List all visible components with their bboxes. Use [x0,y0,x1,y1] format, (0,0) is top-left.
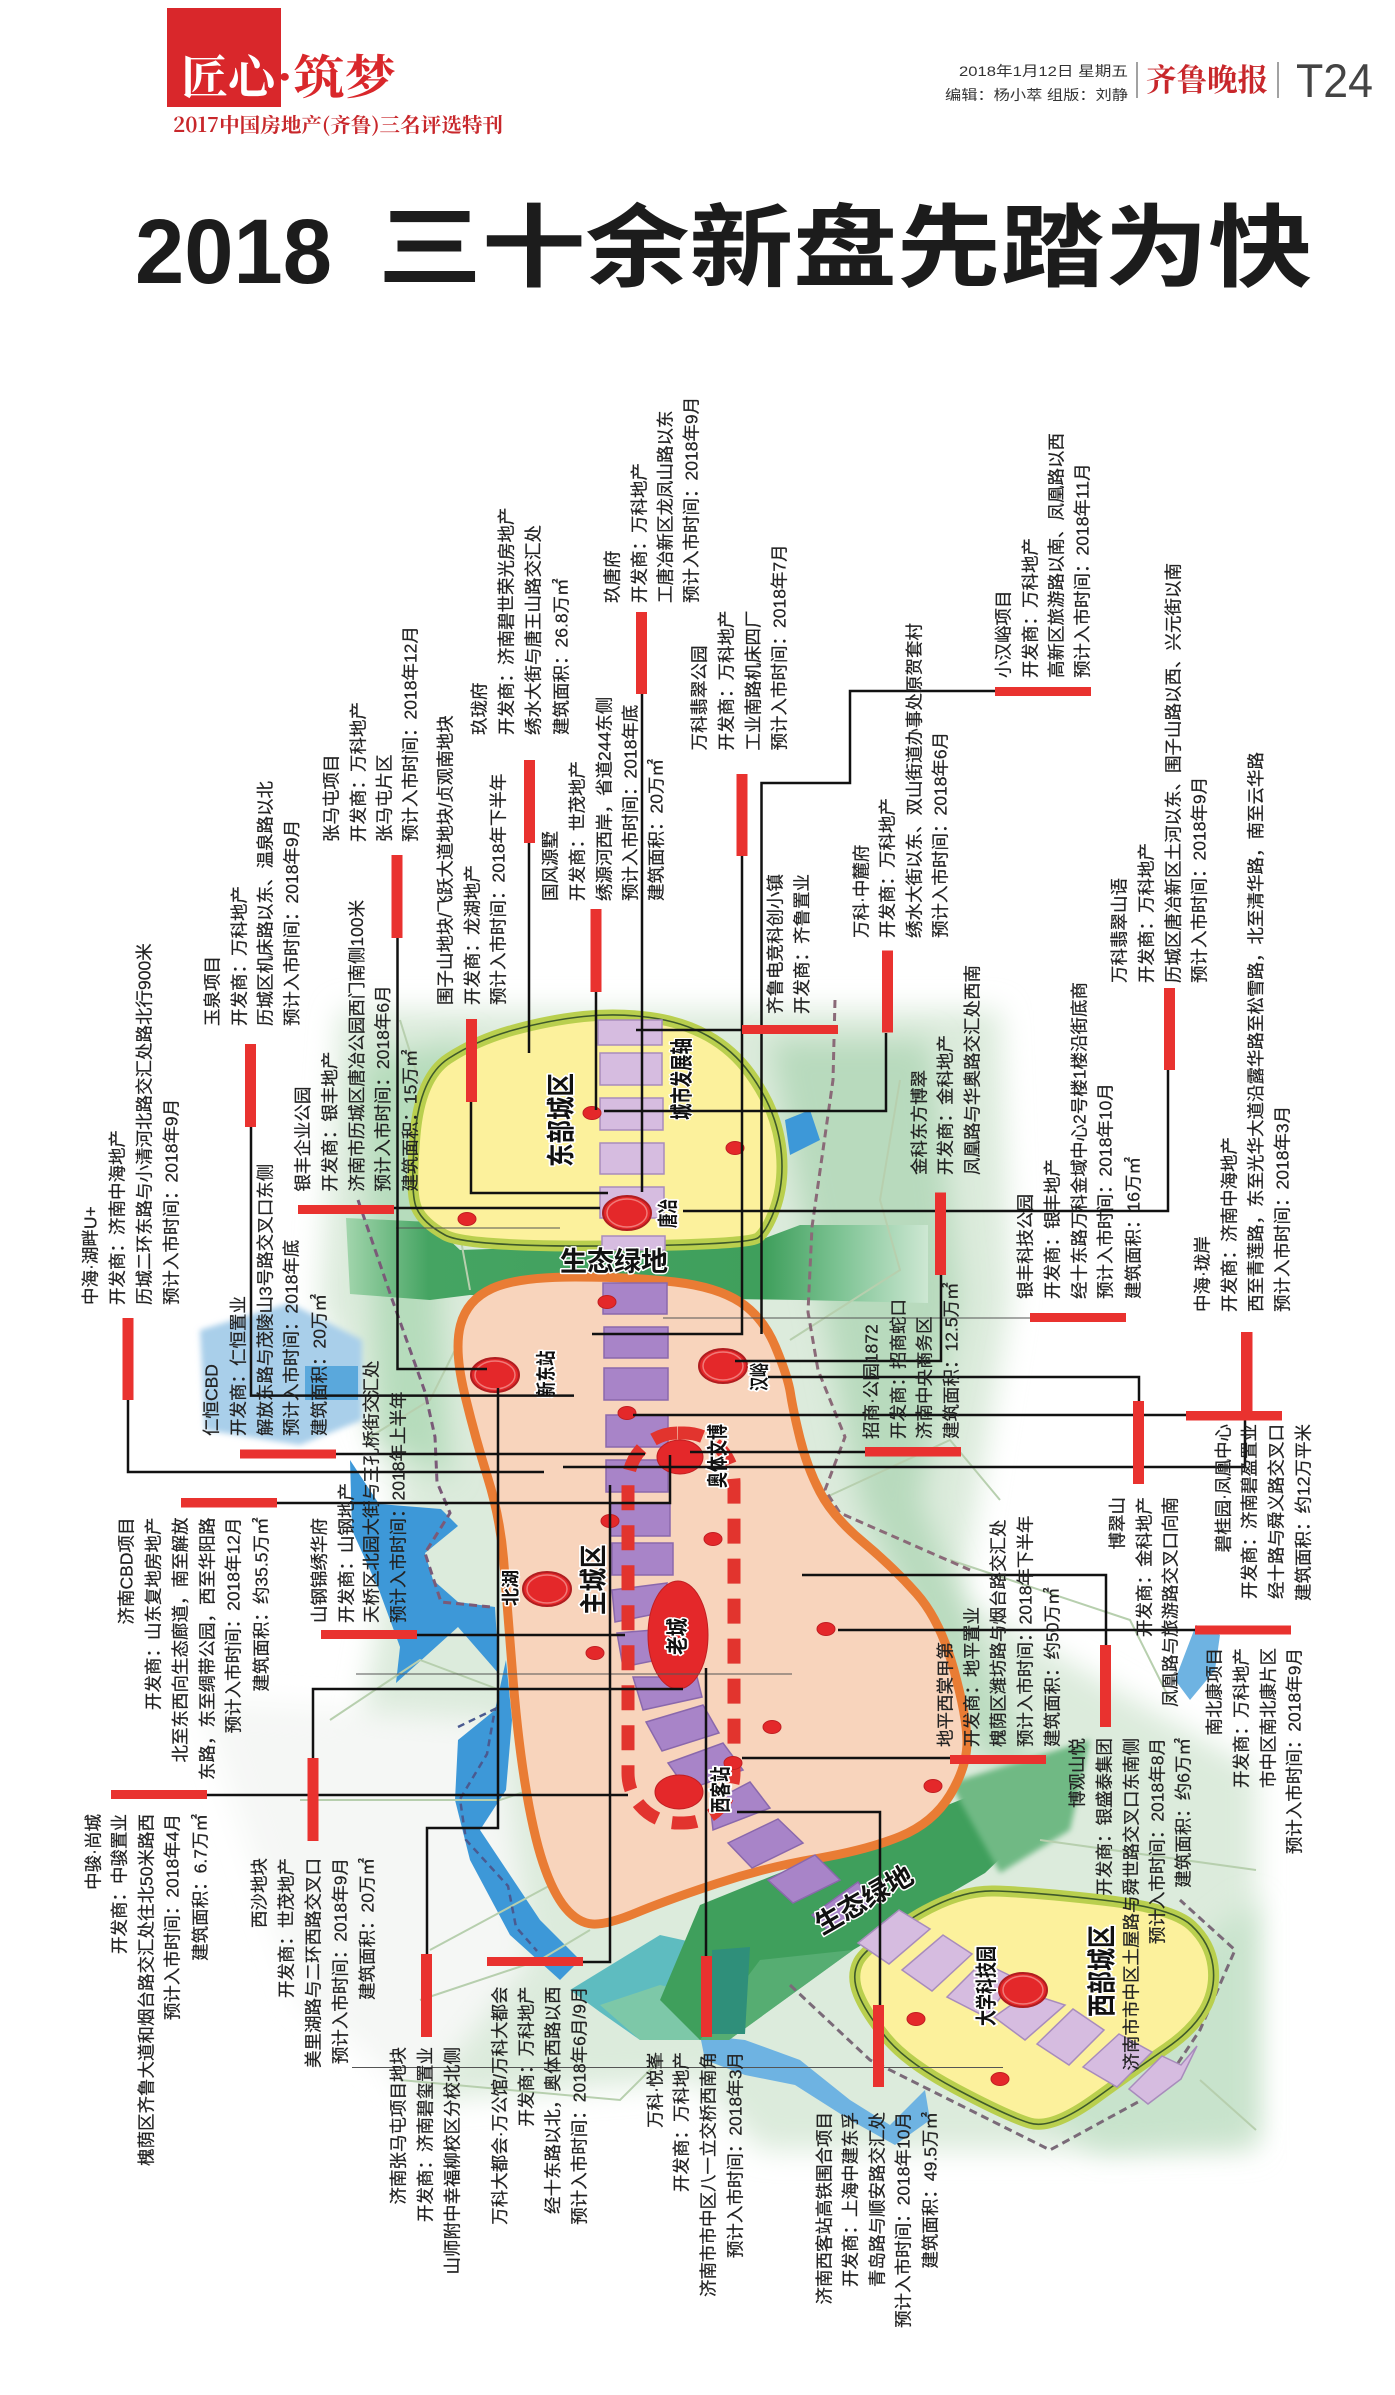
text: 国风源墅: 开发商：世茂地产 [568,761,588,901]
text: 玉泉项目: 玉泉项目 [203,956,223,1026]
text: 招商·公园1872 [862,1282,962,1439]
text: 济南CBD项目: 东路，东至绸带公园，西至华阳路 [198,1517,218,1780]
text: 仁恒CBD: 解放东路与茂陵山3号路交叉口东侧 [256,1164,276,1436]
map: district and place labels: 大学科技园 [970,1946,1001,2026]
text: 济南西客站高铁围合项目: 济南西客站高铁围合项目 [815,2112,835,2304]
text: 博翠山: 博翠山 [1108,1497,1128,1550]
text: 仁恒CBD [202,1164,330,1436]
text: 银丰科技公园: 预计入市时间：2018年10月 [1096,1083,1116,1299]
text: 博观山悦: 建筑面积：约6万㎡ [1174,1738,1194,1888]
text: 围子山地块: 围子山地块/飞跃大道地块/贞观南地块 [436,715,456,1005]
text: 玉泉项目 [203,781,302,1026]
text: 中骏·尚城: 中骏·尚城 [84,1814,104,1890]
text: 玖珑府: 绣水大街与唐王山路交汇处 [524,525,544,735]
text: 国风源墅: 建筑面积：20万㎡ [647,759,667,901]
text: 南北康项目: 南北康项目 [1205,1648,1225,1736]
text: 万科翡翠公园: 工业南路机床四厂 [744,610,764,750]
text: 万科翡翠山语: 万科翡翠山语 [1110,878,1130,983]
map: district and place labels: 汉峪 [743,1363,772,1391]
text: 国风源墅: 预计入市时间：2018年底 [621,705,641,901]
masthead: newspaper name: 齐鲁晚报 [1146,55,1268,100]
text: 仁恒CBD: 开发商：仁恒置业 [229,1296,249,1436]
text: 招商·公园1872: 开发商：招商蛇口 [889,1299,909,1439]
text: 中海·湖畔U+: 中海·湖畔U+ [81,1206,101,1305]
text: 南北康项目 [1205,1648,1305,1854]
text: 济南CBD项目: 开发商：山东复地房地产 [144,1518,164,1710]
text: 万科大都会 [490,1986,590,2225]
title [135,175,1312,305]
text: 小汉峪项目: 高新区旅游路以南、凤凰路以西 [1047,433,1067,678]
text: 齐鲁电竞科创小镇: 齐鲁电竞科创小镇 [766,874,786,1014]
text: 地平西棠甲第: 预计入市时间：2018年下半年 [1016,1516,1036,1747]
text: 地平西棠甲第: 建筑面积：约50万㎡ [1043,1587,1063,1747]
text: 万科·中麓府: 绣水大街以东、双山街道办事处原贺套村 [905,623,925,938]
text: 万科翡翠公园: 开发商：万科地产 [717,610,737,750]
text: 中骏·尚城: 预计入市时间：2018年4月 [163,1814,183,2020]
text: 济南西客站高铁围合项目: 建筑面积：49.5万㎡ [921,2112,941,2269]
map: ecological green belts [346,1218,1090,2040]
text: 济南张马屯项目地块: 济南张马屯项目地块 [389,2047,409,2204]
text: 银丰企业公园: 建筑面积：15万㎡ [400,1049,420,1192]
map: purple development blocks [598,1020,1197,2104]
text: 万科·悦峯: 开发商：万科地产 [672,2052,692,2192]
text: 围子山地块 [436,715,509,1005]
text: 地平西棠甲第: 地平西棠甲第 [936,1642,956,1747]
text: 玖珑府: 建筑面积：26.8万㎡ [552,578,572,735]
text: 小汉峪项目: 开发商：万科地产 [1021,538,1041,678]
text: 小汉峪项目: 小汉峪项目 [994,590,1014,678]
text: 山钢锦绣华府: 天桥区北园大街与三孔桥街交汇处 [362,1360,382,1623]
text: 济南西客站高铁围合项目: 开发商：上海中建东孚 [841,2112,861,2287]
text: 银丰企业公园 [293,900,420,1192]
text: 万科翡翠公园: 预计入市时间：2018年7月 [770,544,790,750]
text: 博翠山 [1108,1497,1181,1707]
text: 金科东方博翠: 金科东方博翠 [910,1070,930,1175]
map: district and place labels: 西客站 [705,1767,735,1813]
page number: T24 [1296,54,1373,107]
text: 仁恒CBD: 仁恒CBD [202,1364,222,1436]
text: 银丰企业公园: 济南市历城区唐冶公园西门南侧100米 [347,900,367,1192]
text: 张马屯项目: 张马屯片区 [375,754,395,842]
map: district and place labels: 西部城区 [1080,1925,1121,2017]
text: 中海·湖畔U+: 开发商：济南中海地产 [108,1130,128,1305]
text: 仁恒CBD: 预计入市时间：2018年底 [282,1240,302,1436]
text: 中海·珑岸: 开发商：济南中海地产 [1220,1137,1240,1312]
map: district and place labels: 东部城区 [539,1073,580,1167]
text: 济南西客站高铁围合项目: 青岛路与顺安路交汇处 [868,2112,888,2287]
text: 金科东方博翠 [910,965,983,1175]
text: 万科翡翠公园 [690,544,790,750]
text: 小汉峪项目 [994,433,1093,678]
text: 小汉峪项目: 预计入市时间：2018年11月 [1073,463,1093,678]
masthead: date and editor credits [945,63,1128,103]
text: 玖珑府: 开发商：济南碧世荣光房地产 [497,508,517,735]
text: 金科东方博翠: 开发商：金科地产 [936,1035,956,1175]
text: 金科东方博翠: 凤凰路与华奥路交汇处西南 [963,965,983,1175]
map: district and place labels: 生态绿地 [806,1854,920,1942]
text: 西沙地块: 开发商：世茂地产 [277,1858,297,1998]
text: 万科大都会: 万科大都会·万公馆/万科大都会 [490,1986,510,2225]
text: 万科翡翠山语 [1110,563,1210,983]
text: 万科·中麓府: 预计入市时间：2018年6月 [931,732,951,938]
zone: west city district [855,1891,1214,2124]
text: 济南CBD项目: 建筑面积：约35.5万㎡ [252,1517,272,1692]
text: 山钢锦绣华府: 开发商：山钢地产 [337,1483,357,1623]
text: 博翠山: 开发商：金科地产 [1135,1497,1155,1637]
text: 玖珑府 [470,508,572,735]
text: 中海·湖畔U+: 历城二环东路与小清河北路交汇处路北行900米 [135,943,155,1305]
text: 万科·悦峯 [646,2052,746,2297]
text: 玉泉项目: 开发商：万科地产 [230,886,250,1026]
text: 山钢锦绣华府 [310,1360,409,1623]
map: district and place labels: 城市发展轴 [663,1038,696,1120]
text: 西沙地块: 美里湖路与二环西路交叉口 [304,1858,324,2068]
text: 万科·中麓府 [852,623,951,938]
text: 招商·公园1872: 建筑面积：12.5万㎡ [942,1282,962,1439]
text: 万科·悦峯: 预计入市时间：2018年3月 [726,2052,746,2258]
zone: main city district [458,1277,967,1924]
text: 万科大都会: 开发商：万科地产 [516,1986,536,2126]
text: 碧桂园·凤凰中心: 经十路与舜义路交叉口 [1267,1424,1287,1599]
text: 玉泉项目: 预计入市时间：2018年9月 [282,820,302,1026]
text: 博观山悦: 济南市市中区土屋路与舜世路交叉口东南侧 [1122,1738,1142,2070]
map: river system [200,1110,1220,2145]
text: 中骏·尚城: 槐荫区齐鲁大道和烟台路交汇处往北50米路西 [137,1814,157,2166]
text: 招商·公园1872: 济南中央商务区 [915,1316,935,1439]
text: 玖唐府: 工唐冶新区龙凤山路以东 [656,410,676,603]
text: 张马屯项目: 预计入市时间：2018年12月 [401,626,421,842]
text: 张马屯项目: 张马屯项目 [322,754,342,842]
text: 中海·珑岸: 西至青莲路，东至光华大道沿露华路至松雪路，北至清华路，南至云华路 [1246,752,1266,1312]
map: district and place labels: 主城区 [572,1545,612,1615]
red callout bars [111,612,1291,2087]
text: 中海·珑岸: 预计入市时间：2018年3月 [1273,1106,1293,1312]
connector lines from project callouts to map points [128,691,1245,2005]
text: 中海·珑岸 [1193,752,1293,1312]
text: 银丰企业公园: 开发商：银丰地产 [320,1052,340,1192]
text: 玖唐府: 开发商：万科地产 [630,463,650,603]
text: 济南CBD项目: 济南CBD项目 [117,1518,137,1624]
text: 济南张马屯项目地块 [389,2047,463,2274]
text: 玖唐府: 预计入市时间：2018年9月 [682,397,702,603]
text: 西沙地块: 建筑面积：20万㎡ [358,1858,378,2000]
map: district and place labels: 生态绿地 [560,1240,668,1279]
text: 玖唐府: 玖唐府 [603,550,623,603]
text: 碧桂园·凤凰中心: 碧桂园·凤凰中心 [1214,1424,1234,1552]
text: 万科·悦峯: 万科·悦峯 [646,2052,666,2128]
text: 中骏·尚城 [84,1814,211,2166]
text: 博观山悦 [1068,1738,1194,2070]
text: 齐鲁电竞科创小镇: 开发商：齐鲁置业 [792,874,812,1014]
zone: east city district [413,1015,782,1246]
masthead: date and editor credits: 编辑：杨小萃 组版：刘静 [945,87,1128,103]
text: 万科翡翠山语: 开发商：万科地产 [1137,843,1157,983]
text: 中骏·尚城: 建筑面积：6.7万㎡ [191,1814,211,1961]
text: 万科·中麓府: 万科·中麓府 [852,845,872,938]
text: 碧桂园·凤凰中心: 开发商：济南碧盈置业 [1240,1424,1260,1599]
text: 中海·湖畔U+ [81,943,182,1305]
text: 国风源墅: 绣源河西岸，省道244东侧 [595,697,615,901]
text: 济南CBD项目: 预计入市时间：2018年12月 [224,1518,244,1733]
text: 山钢锦绣华府: 山钢锦绣华府 [310,1518,330,1623]
text: 济南张马屯项目地块: 山师附中幸福柳校区分校北侧 [443,2047,463,2274]
map: district and place labels: 新东站 [531,1350,560,1397]
text: 南北康项目: 开发商：万科地产 [1232,1648,1252,1788]
text: 张马屯项目: 开发商：万科地产 [349,702,369,842]
map: roads and boundary [300,1000,1256,2150]
text: 国风源墅 [541,697,667,901]
text: 南北康项目: 市中区南北康片区 [1259,1648,1279,1788]
text: 玖唐府 [603,397,702,603]
text: 济南CBD项目 [117,1517,272,1780]
map: dashed old town ring [628,1433,734,1823]
text: 银丰科技公园 [1016,982,1144,1299]
text: 博观山悦: 开发商：银盛泰集团 [1095,1738,1115,1896]
text: 西沙地块 [250,1858,378,2068]
text: 济南西客站高铁围合项目: 预计入市时间：2018年10月 [894,2112,914,2328]
text: 玉泉项目: 历城区机床路以东、温泉路以北 [256,781,276,1026]
title: 2018 [135,201,332,303]
masthead: column logo [167,8,503,138]
text: 博翠山: 凤凰路与旅游路交叉口向南 [1161,1497,1181,1707]
text: 济南西客站高铁围合项目 [815,2112,941,2328]
map: district and place labels [497,1038,1121,2026]
text: 万科翡翠公园: 万科翡翠公园 [690,646,710,750]
text: 地平西棠甲第 [936,1516,1063,1747]
text: 西沙地块: 西沙地块 [250,1858,270,1928]
text: 国风源墅: 国风源墅 [541,831,561,901]
text: 银丰科技公园: 开发商：银丰地产 [1043,1159,1063,1299]
text: 碧桂园·凤凰中心: 建筑面积：约12万平米 [1294,1424,1314,1601]
masthead: column logo: 匠心 [181,41,281,108]
text: 银丰企业公园: 银丰企业公园 [293,1087,313,1192]
text: 地平西棠甲第: 开发商：地平置业 [962,1607,982,1747]
text: 围子山地块: 预计入市时间：2018年下半年 [489,774,509,1005]
text: 博观山悦: 预计入市时间：2018年8月 [1148,1738,1168,1944]
text: 西沙地块: 预计入市时间：2018年9月 [331,1858,351,2064]
text: 博观山悦: 博观山悦 [1068,1738,1088,1808]
text: 银丰科技公园: 建筑面积：16万㎡ [1124,1157,1144,1299]
text: 银丰科技公园: 经十东路万科金域中心2号楼1楼沿街底商 [1070,982,1090,1299]
text: 招商·公园1872: 招商·公园1872 [862,1324,882,1439]
text: 中海·湖畔U+: 预计入市时间：2018年9月 [162,1099,182,1305]
map: red location markers [458,1106,1047,2086]
map: faded terrain base [200,1010,1256,2150]
map: district and place labels: 老城 [659,1617,692,1655]
text: 万科·中麓府: 开发商：万科地产 [878,798,898,938]
map: district and place labels: 奥体文博 [701,1424,732,1488]
masthead: column logo: 2017中国房地产(齐鲁)三名评选特刊 [173,109,503,138]
text: 银丰企业公园: 预计入市时间：2018年6月 [373,985,393,1192]
text: 碧桂园·凤凰中心 [1214,1424,1314,1601]
text: 仁恒CBD: 建筑面积：20万㎡ [310,1294,330,1436]
thin leader lines [352,1228,1030,2068]
text: 山钢锦绣华府: 预计入市时间：2018年上半年 [389,1392,409,1623]
map: district and place labels: 唐冶 [653,1199,682,1228]
text: 围子山地块: 开发商：龙湖地产 [463,865,483,1005]
text: 济南张马屯项目地块: 开发商：济南碧玺置业 [416,2047,436,2222]
text: 万科翡翠山语: 历城区唐冶新区土河以东、围子山路以西、兴元街以南 [1164,563,1184,983]
text: 玖珑府: 玖珑府 [470,682,490,735]
text: 南北康项目: 预计入市时间：2018年9月 [1285,1648,1305,1854]
map: district and place labels: 北湖 [497,1570,523,1606]
title: 三十余新盘先踏为快 [378,175,1312,305]
text: 地平西棠甲第: 槐荫区潍坊路与烟台路交汇处 [989,1520,1009,1747]
text: 中海·珑岸: 中海·珑岸 [1193,1236,1213,1312]
text: 张马屯项目 [322,626,421,842]
masthead: date and editor credits: 2018年1月12日 星期五 [959,63,1128,79]
city planning map [200,1000,1256,2150]
text: 济南CBD项目: 北至东西向生态廊道，南至解放 [171,1518,191,1762]
text: 万科翡翠山语: 预计入市时间：2018年9月 [1190,777,1210,983]
text: 万科大都会: 经十东路以北，奥体西路以西 [543,1986,563,2214]
text: 银丰科技公园: 银丰科技公园 [1016,1194,1036,1299]
masthead: column logo: ·筑梦 [276,41,396,108]
text: 中骏·尚城: 开发商：中骏置业 [110,1814,130,1954]
text: 万科大都会: 预计入市时间：2018年6月/9月 [570,1986,590,2225]
text: 齐鲁电竞科创小镇 [766,874,812,1014]
text: 万科·悦峯: 济南市市中区八一立交桥西南角 [699,2052,719,2297]
